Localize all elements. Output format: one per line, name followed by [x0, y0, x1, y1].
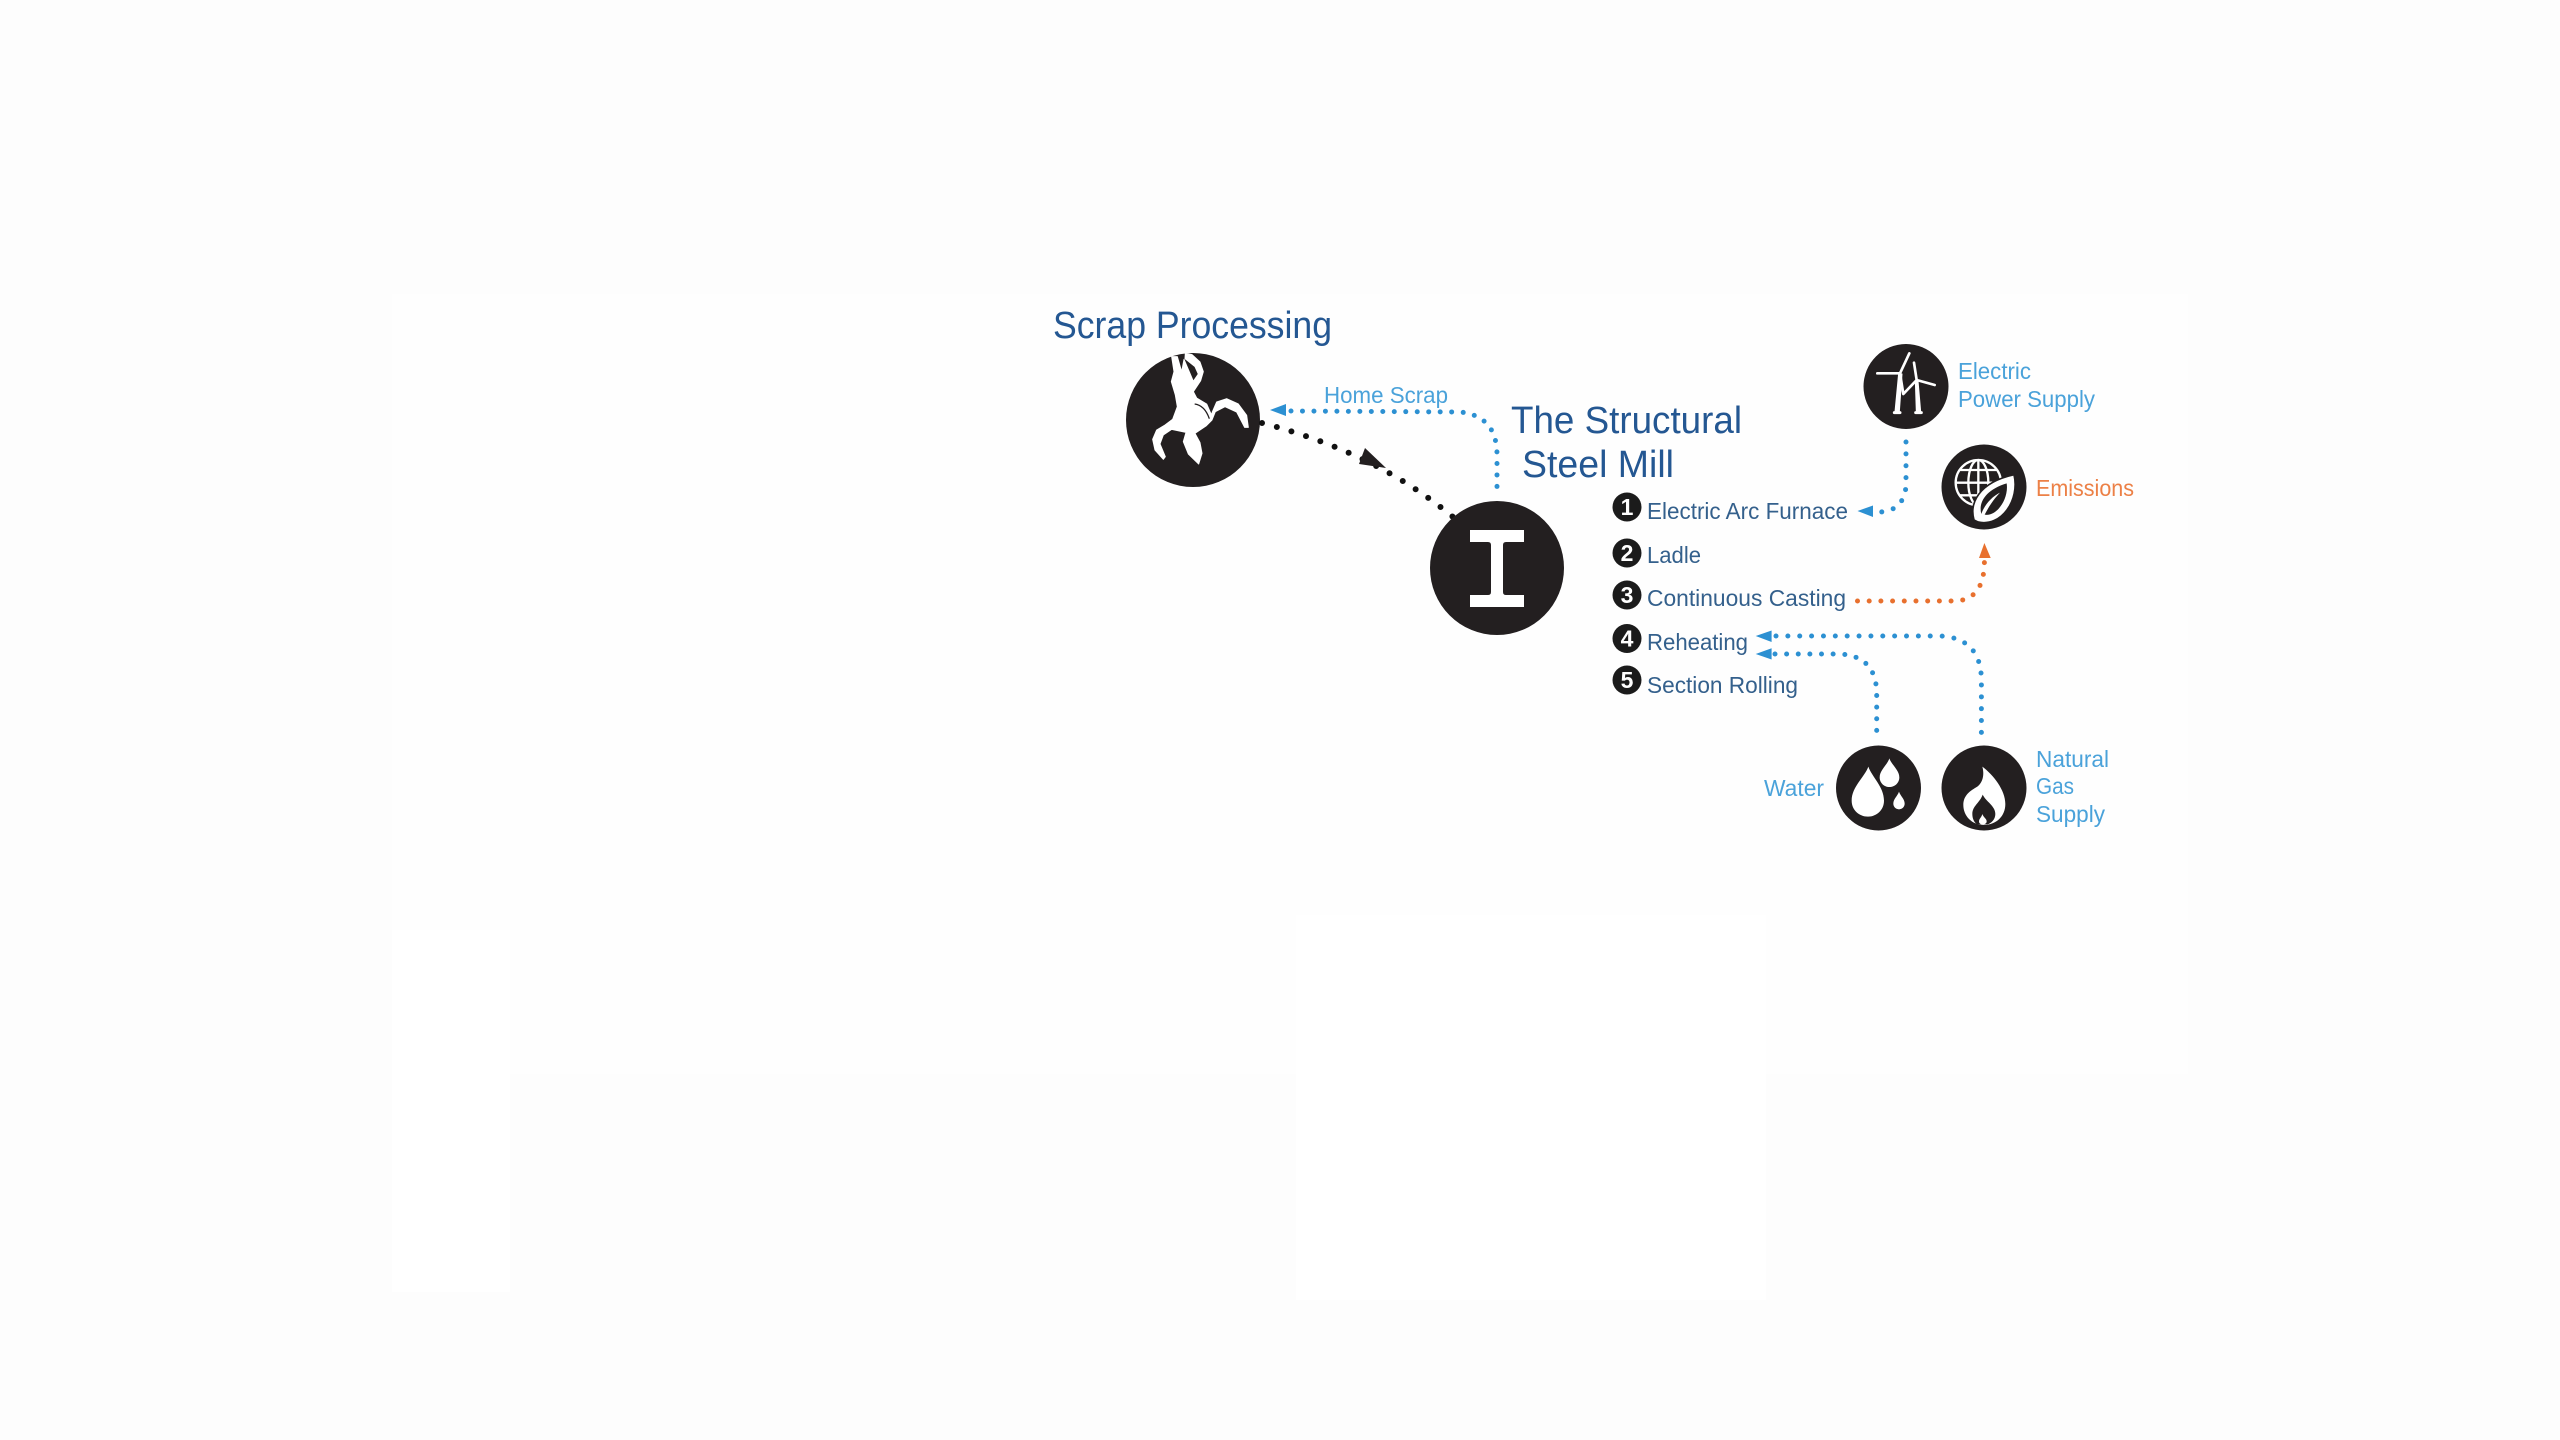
- label: Natural Gas Supply: Supply: [2036, 801, 2105, 827]
- step 2: Ladle: [1612, 538, 1701, 568]
- arrow: continuous casting to emissions: [1858, 543, 1991, 601]
- icon: water drops: [1836, 746, 1921, 830]
- label: Electric Power Supply: Power Supply: [1958, 386, 2095, 412]
- step 5: Section Rolling: Section Rolling: [1647, 672, 1798, 698]
- step 2: Ladle: 2: [1621, 540, 1633, 566]
- label: Natural Gas Supply: [2036, 746, 2109, 827]
- icon: emissions globe and leaf: [1942, 444, 2026, 530]
- label: Natural Gas Supply: Natural: [2036, 746, 2109, 772]
- step 4: Reheating: [1612, 624, 1748, 655]
- label: Emissions: Emissions: [2036, 475, 2134, 501]
- label: Electric Power Supply: Electric: [1958, 358, 2031, 384]
- step 3: Continuous Casting: Continuous Casting: [1647, 585, 1846, 611]
- label: Natural Gas Supply: Gas: [2036, 773, 2074, 799]
- step 5: Section Rolling: 5: [1621, 667, 1634, 693]
- step 1: Electric Arc Furnace: Electric Arc Furnace: [1647, 498, 1848, 524]
- step 4: Reheating: 4: [1621, 626, 1634, 652]
- arrow: water to reheating: [1756, 648, 1877, 731]
- icon: I-beam steel mill: [1430, 501, 1564, 635]
- step 3: Continuous Casting: 3: [1621, 582, 1633, 608]
- heading: The Structural Steel Mill: Steel Mill: [1522, 444, 1674, 486]
- label: Electric Power Supply: [1958, 358, 2095, 412]
- arrow: scrap to steel mill: [1262, 423, 1453, 517]
- icon: natural gas flame: [1942, 746, 2026, 830]
- step 1: Electric Arc Furnace: [1612, 492, 1848, 524]
- heading: Scrap Processing: Scrap Processing: [1053, 305, 1332, 347]
- step 2: Ladle: Ladle: [1647, 542, 1701, 568]
- step 5: Section Rolling: [1612, 666, 1798, 698]
- heading: The Structural Steel Mill: The Structural: [1511, 400, 1742, 442]
- step 1: Electric Arc Furnace: 1: [1621, 494, 1634, 520]
- step 4: Reheating: Reheating: [1647, 629, 1748, 655]
- arrow: electric power to furnace: [1858, 442, 1906, 517]
- label: Home Scrap: Home Scrap: [1324, 382, 1448, 408]
- icon: wind turbines: [1864, 344, 1948, 429]
- heading: The Structural Steel Mill: [1511, 400, 1742, 486]
- icon: scrap processing claw: [1126, 353, 1260, 487]
- list: mill process steps: [1612, 492, 1848, 698]
- label: Water: Water: [1764, 775, 1824, 801]
- arrow: home scrap return to scrap processing: [1270, 404, 1497, 487]
- arrow: natural gas to reheating: [1756, 630, 1981, 733]
